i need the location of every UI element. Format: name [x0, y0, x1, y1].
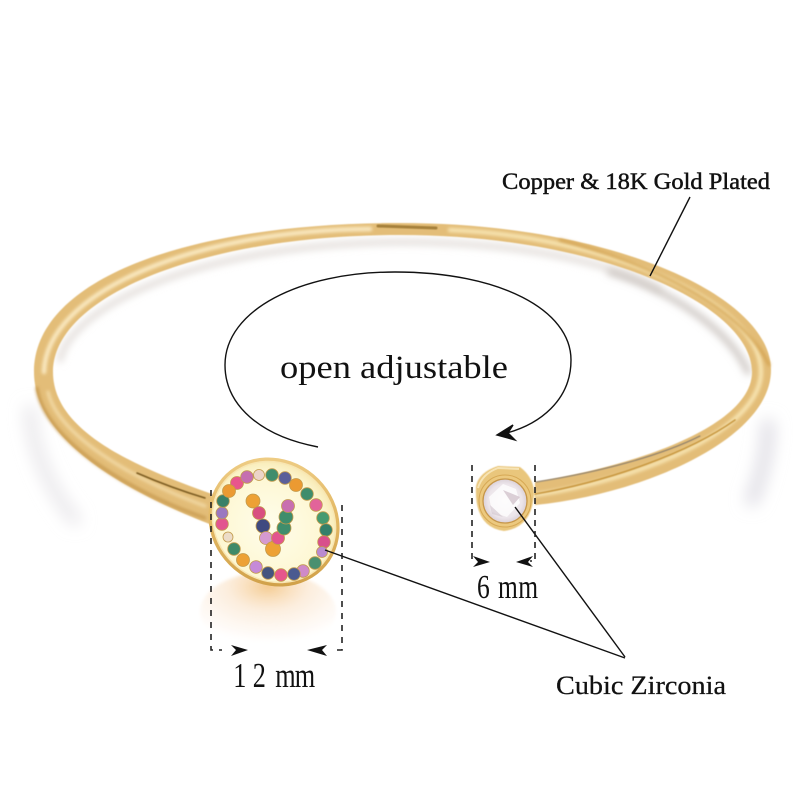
bangle wire: [34, 223, 771, 525]
dimension: 12mm: [211, 490, 342, 695]
label: open adjustable: open adjustable: [280, 350, 508, 386]
dimension: 6mm: 6mm: [477, 567, 538, 606]
label: copper and gold plating: Copper & 18K Gold Plated: [502, 169, 771, 194]
dimension: 6mm: [472, 465, 538, 606]
disc charm with letter V: [182, 431, 366, 613]
leader lines: cubic zirconia: [325, 507, 625, 658]
curved adjustable arrow: [225, 272, 571, 447]
letter V stones: [246, 494, 294, 556]
reflection under disc: [200, 572, 336, 652]
label: cubic zirconia: Cubic Zirconia: [556, 671, 726, 700]
dimension: 12mm: 12mm: [233, 655, 315, 695]
round gem charm: [476, 466, 534, 531]
soft shadows around the bangle: [30, 242, 768, 520]
gemstone ring: [216, 469, 332, 581]
leader line: plating: [650, 197, 690, 276]
